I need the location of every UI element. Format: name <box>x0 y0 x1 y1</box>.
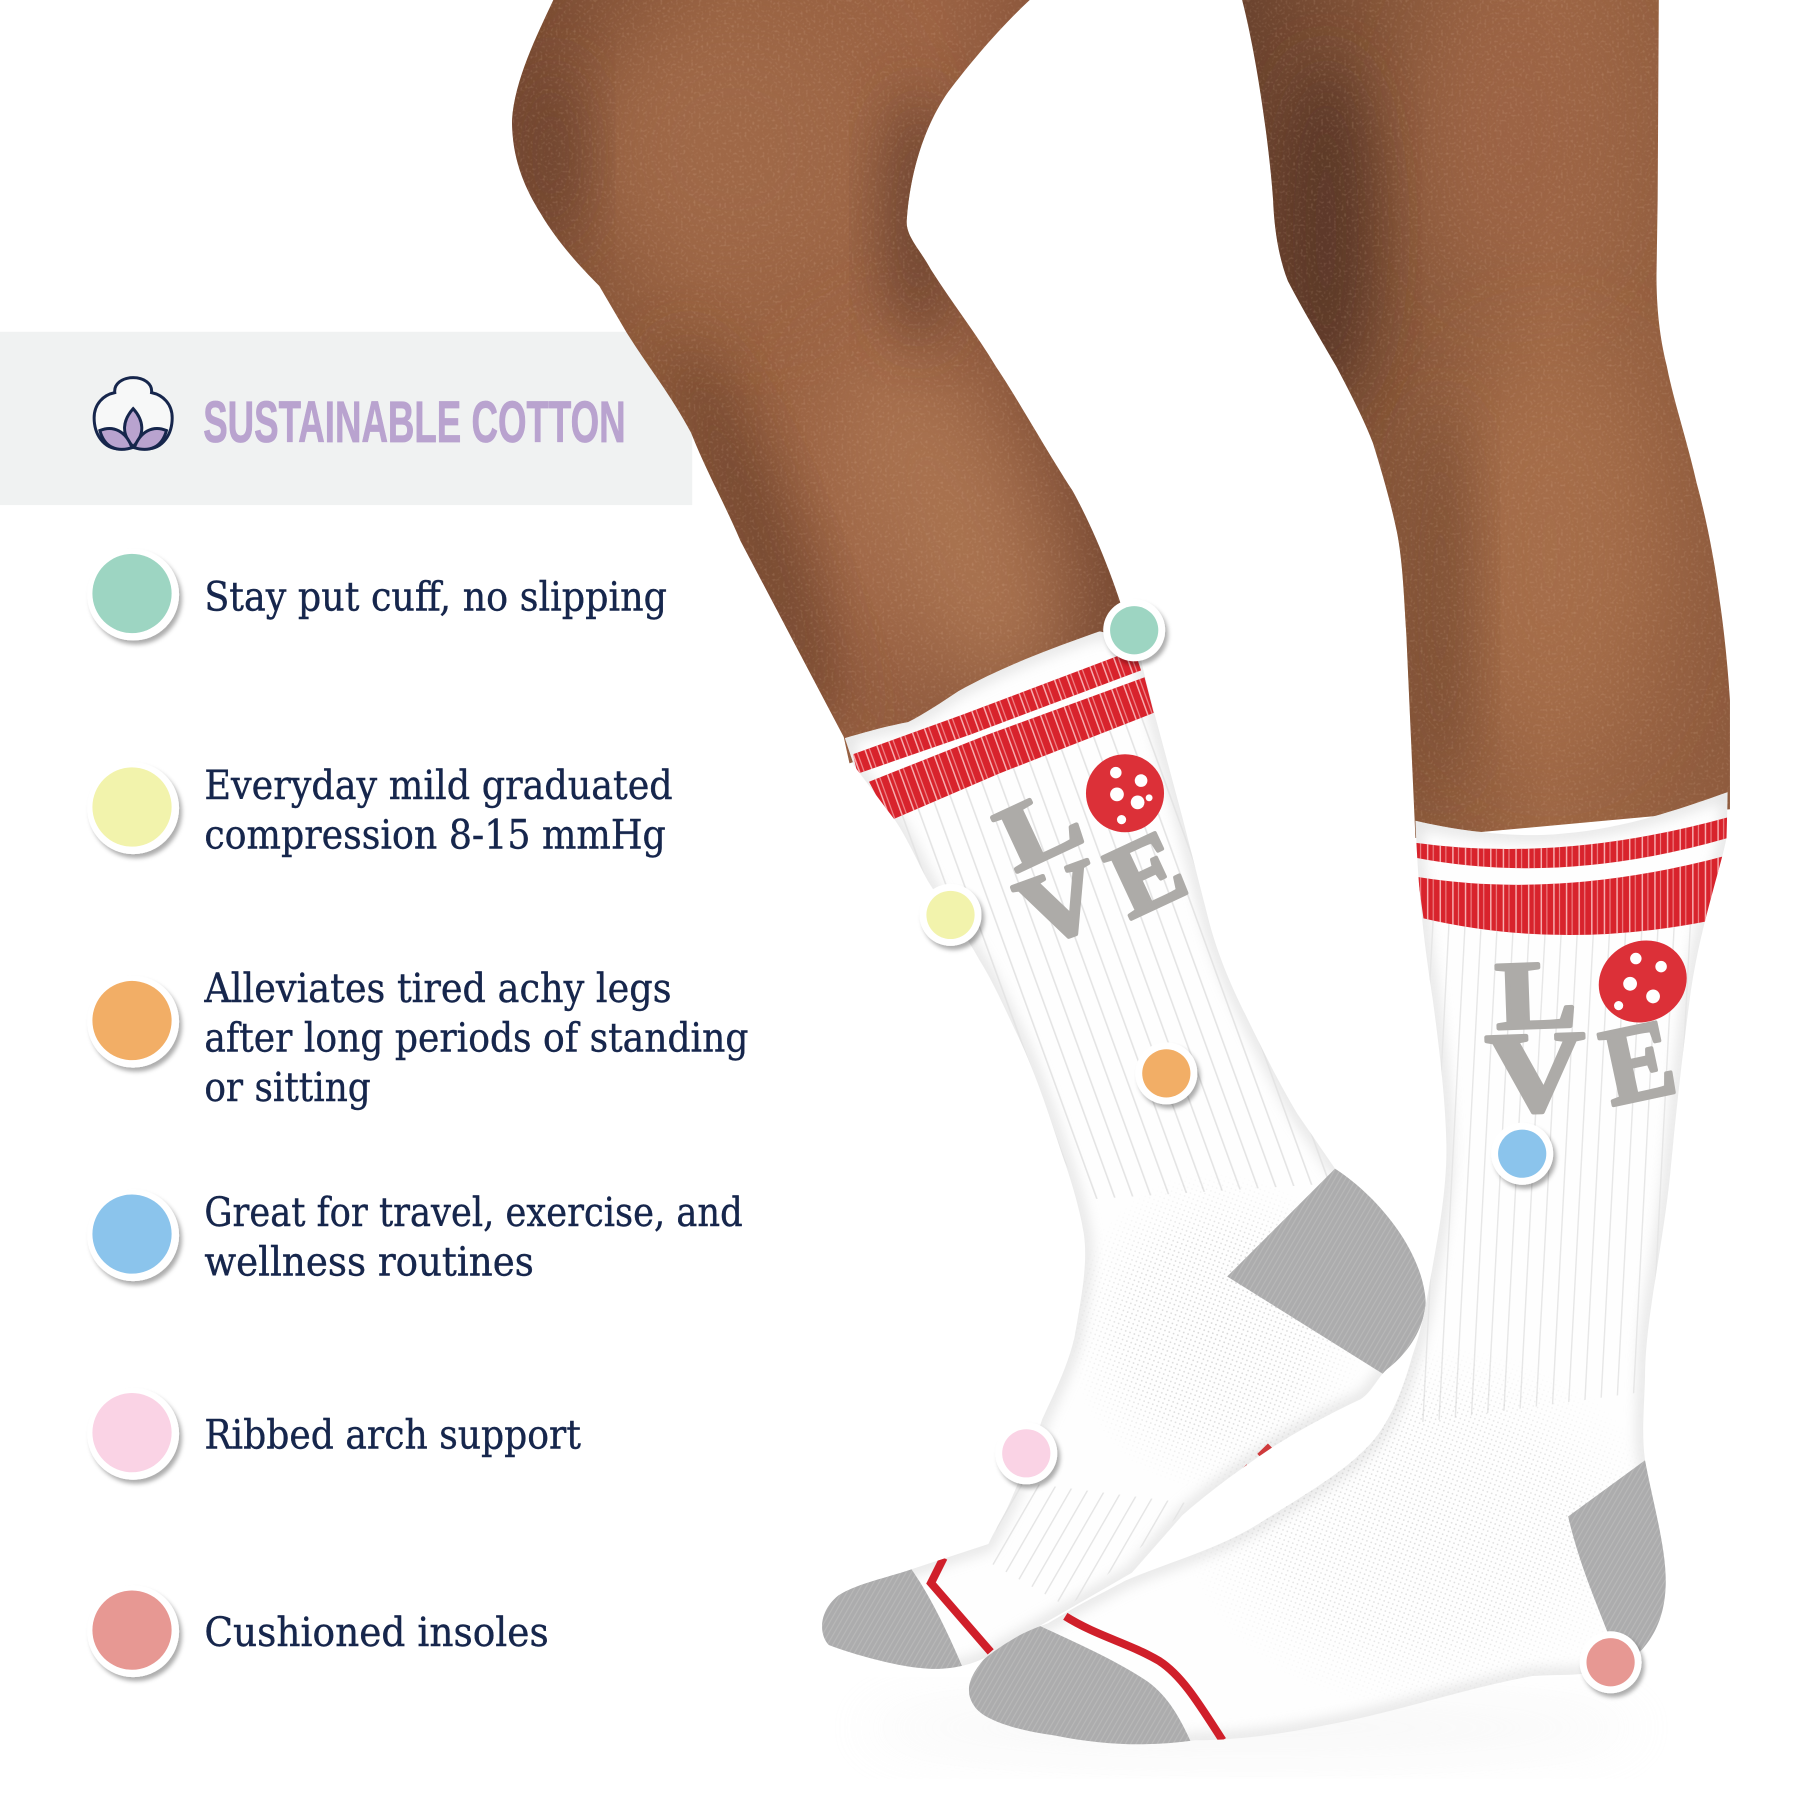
toe <box>820 1569 964 1672</box>
upper red stripe <box>853 650 1141 774</box>
feature 4: travel and exercise <box>87 1189 743 1285</box>
letter E: E <box>1591 996 1685 1130</box>
cuff ribs <box>902 718 1328 1199</box>
marker: cuff <box>1103 599 1165 661</box>
label: ribbed arch support: Ribbed arch support <box>204 1413 581 1459</box>
sock: right foot <box>953 781 1745 1768</box>
feature 1: stay put cuff <box>87 549 667 641</box>
legend dot: pink <box>87 1388 179 1480</box>
letter V: V <box>1484 1008 1588 1138</box>
label: graduated compression: Everyday mild graduated <box>204 763 673 809</box>
legend dot: yellow <box>87 762 179 854</box>
letter E: E <box>1091 808 1202 940</box>
label: alleviates tired legs: or sitting <box>204 1065 371 1111</box>
label: travel and exercise: wellness routines <box>204 1239 534 1285</box>
label: alleviates tired legs <box>203 966 748 1111</box>
icon: cotton boll <box>94 378 172 449</box>
panel: sustainable cotton banner <box>0 332 692 505</box>
marker: insole <box>1580 1631 1642 1693</box>
label: cushioned insoles: Cushioned insoles <box>204 1610 549 1656</box>
label: alleviates tired legs: after long periods of standing <box>204 1016 748 1062</box>
feature 5: ribbed arch support <box>87 1388 581 1480</box>
letter L: L <box>1494 940 1578 1050</box>
legend dot: coral <box>87 1585 179 1677</box>
love graphic: right sock <box>1484 926 1700 1138</box>
pickleball <box>1086 754 1164 832</box>
feature 6: cushioned insoles <box>87 1585 549 1677</box>
letter L: L <box>982 765 1097 891</box>
leg: left (bent knee) <box>512 0 1120 764</box>
lower red stripe <box>869 677 1154 821</box>
heel <box>1227 1169 1429 1374</box>
foot shadow <box>861 1702 1642 1753</box>
upper red stripe <box>1414 817 1728 868</box>
red toe line <box>931 1558 991 1652</box>
label: alleviates tired legs: Alleviates tired achy legs <box>203 966 672 1012</box>
red toe line <box>1065 1616 1223 1740</box>
feature 3: alleviates tired legs <box>87 966 748 1111</box>
legend dot: blue <box>87 1189 179 1281</box>
letter V: V <box>1003 838 1118 969</box>
marker: arch <box>995 1422 1057 1484</box>
ankle ribs <box>1412 907 1722 1423</box>
label: travel and exercise: Great for travel, exercise, and <box>204 1190 743 1236</box>
label: travel and exercise <box>204 1190 743 1285</box>
arch red marks <box>1243 1444 1272 1468</box>
label: graduated compression <box>204 763 673 858</box>
label: graduated compression: compression 8-15 mmHg <box>204 812 666 858</box>
feature 2: graduated compression <box>87 762 673 858</box>
heading: sustainable cotton: SUSTAINABLE COTTON <box>203 390 626 455</box>
marker: travel <box>1491 1123 1553 1185</box>
lower red stripe <box>1418 855 1728 935</box>
sock: left foot <box>822 631 1426 1669</box>
heel <box>1568 1460 1682 1665</box>
leg: right <box>1228 0 1745 872</box>
pickleball <box>1585 926 1700 1037</box>
toe <box>959 1626 1197 1756</box>
legend dot: orange <box>87 976 179 1068</box>
marker: compression <box>920 884 982 946</box>
marker: tired legs <box>1135 1042 1197 1104</box>
label: stay put cuff: Stay put cuff, no slipping <box>204 575 667 621</box>
legend dot: mint <box>87 549 179 641</box>
love graphic: left sock <box>982 754 1202 969</box>
